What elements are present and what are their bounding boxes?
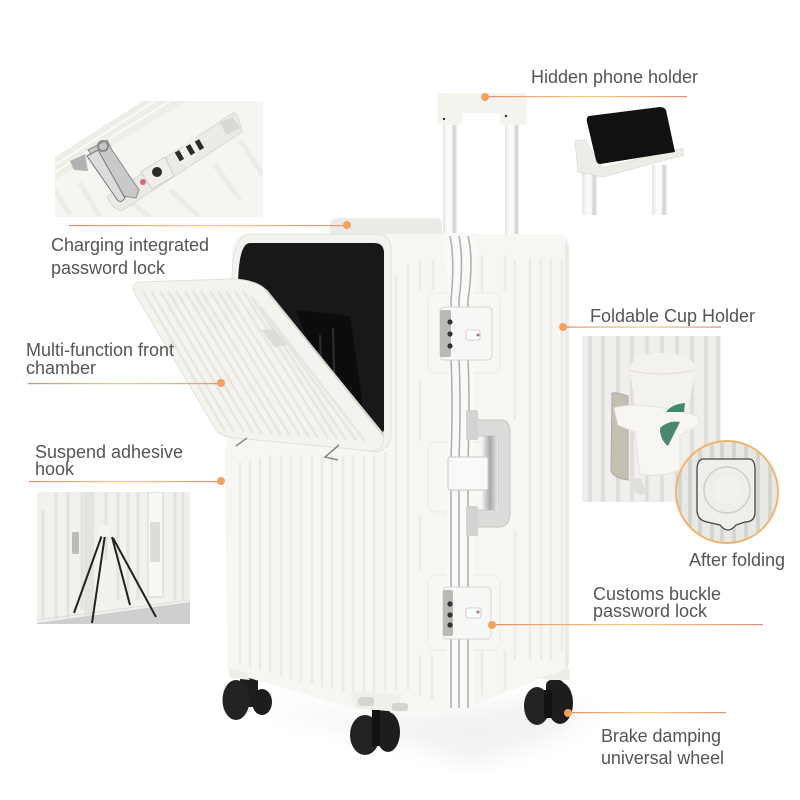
wheels back <box>240 672 573 752</box>
top carry handle <box>330 218 442 236</box>
inset: adhesive hook <box>37 492 190 624</box>
callout: hidden phone holder <box>481 67 698 101</box>
callout: brake damping universal wheel: universal wheel <box>601 748 724 768</box>
inset: charging lock detail <box>55 101 263 217</box>
inset: phone holder <box>575 107 684 215</box>
lock: customs buckle password lock <box>443 587 491 639</box>
trolley handle <box>438 93 527 234</box>
callout: customs buckle password lock: password lock <box>593 601 708 621</box>
callout: brake damping universal wheel <box>564 709 726 768</box>
side handle with latch <box>448 410 510 536</box>
inset: cup holder <box>582 336 721 502</box>
callout: suspend adhesive hook: hook <box>35 459 75 479</box>
callout: suspend adhesive hook <box>29 442 225 485</box>
callout: charging integrated password lock: password lock <box>51 258 166 278</box>
lower body ribs <box>240 255 562 700</box>
callout: foldable cup holder <box>559 306 755 331</box>
callout: brake damping universal wheel: Brake damping <box>601 726 721 746</box>
front chamber open flap <box>133 279 384 451</box>
callout: charging integrated password lock: Charging integrated <box>51 235 209 255</box>
brand tag <box>262 329 287 347</box>
callout: customs buckle password lock: Customs buckle <box>593 584 721 604</box>
lock: upper password lock <box>440 307 492 360</box>
callout: foldable cup holder: Foldable Cup Holder <box>590 306 755 326</box>
wheel caps <box>228 668 250 680</box>
lock recesses <box>428 293 500 373</box>
inset: after folding circle <box>676 440 778 545</box>
callout: multi-function front chamber <box>26 340 225 387</box>
front chamber interior <box>232 234 391 452</box>
callout: hidden phone holder: Hidden phone holder <box>531 67 698 87</box>
floor shadow <box>260 700 590 765</box>
label: after folding: After folding <box>689 550 785 570</box>
zipper pulls <box>236 438 339 460</box>
callout: charging integrated password lock <box>51 221 351 278</box>
callout: multi-function front chamber: chamber <box>26 358 96 378</box>
aluminium frame <box>443 233 478 712</box>
panel: suitcase body <box>225 234 570 712</box>
callout: multi-function front chamber: Multi-function front <box>26 340 174 360</box>
callout: customs buckle password lock <box>488 584 763 629</box>
wheels front <box>222 680 552 755</box>
callout: suspend adhesive hook: Suspend adhesive <box>35 442 183 462</box>
